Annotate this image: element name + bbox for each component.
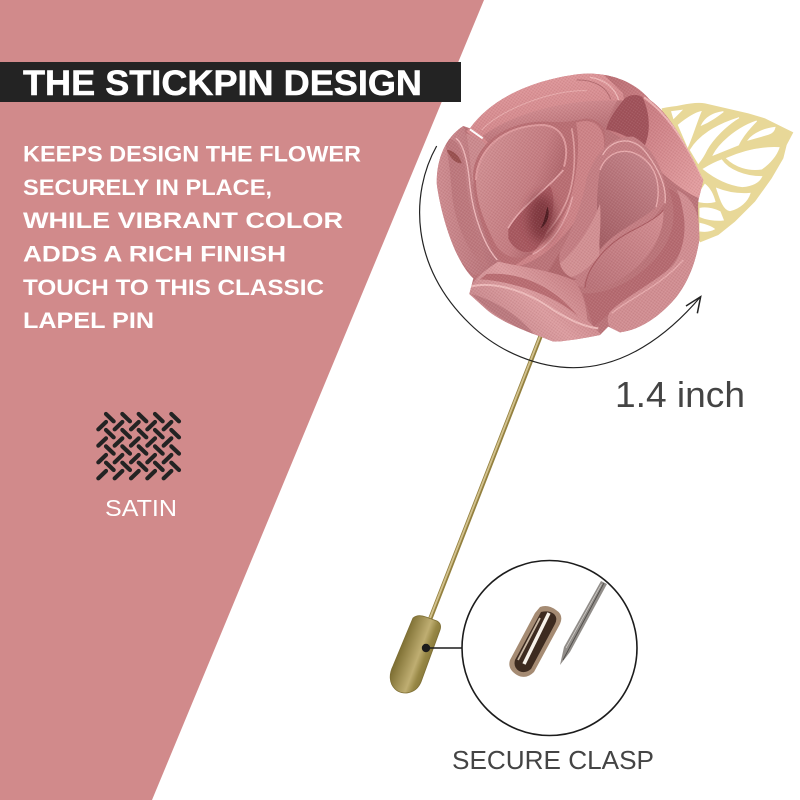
icon: gold filigree leaf xyxy=(662,103,793,242)
size arc arrow xyxy=(420,146,701,368)
petal: centre inner bowl xyxy=(476,125,566,258)
icon: satin weave xyxy=(98,414,179,478)
petal: top back xyxy=(467,71,624,148)
description text block: TOUCH TO THIS CLASSIC xyxy=(23,275,324,300)
label: satin: SATIN xyxy=(105,495,177,521)
callout circle: clasp close-up xyxy=(462,560,637,736)
label: 1.4 inch: 1.4 inch xyxy=(615,374,745,415)
title bar: THE STICKPIN DESIGN xyxy=(23,64,422,103)
flower rosette xyxy=(420,70,710,368)
icon: needle point xyxy=(560,581,607,665)
label: secure clasp: SECURE CLASP xyxy=(452,745,654,775)
petal: right centre lobes xyxy=(560,136,666,287)
petal: lower right xyxy=(583,188,687,327)
description text block: SECURELY IN PLACE, xyxy=(23,175,272,200)
description text block: LAPEL PIN xyxy=(23,308,154,333)
pink diagonal background panel xyxy=(0,0,484,800)
petal: top right fold xyxy=(602,73,705,198)
pin clasp cap xyxy=(390,616,441,693)
icon: clasp tube xyxy=(509,606,561,677)
petal: far left xyxy=(436,126,473,272)
petal: bottom xyxy=(468,262,602,343)
description text block: WHILE VIBRANT COLOR xyxy=(23,208,343,233)
fabric texture overlay xyxy=(430,70,710,347)
petal: large centre swirl outer xyxy=(473,118,597,236)
description text block: KEEPS DESIGN THE FLOWER xyxy=(23,142,361,166)
callout connector xyxy=(422,644,462,652)
description text block: ADDS A RICH FINISH xyxy=(23,242,286,266)
pin shaft xyxy=(428,335,541,622)
description text block xyxy=(23,142,361,333)
